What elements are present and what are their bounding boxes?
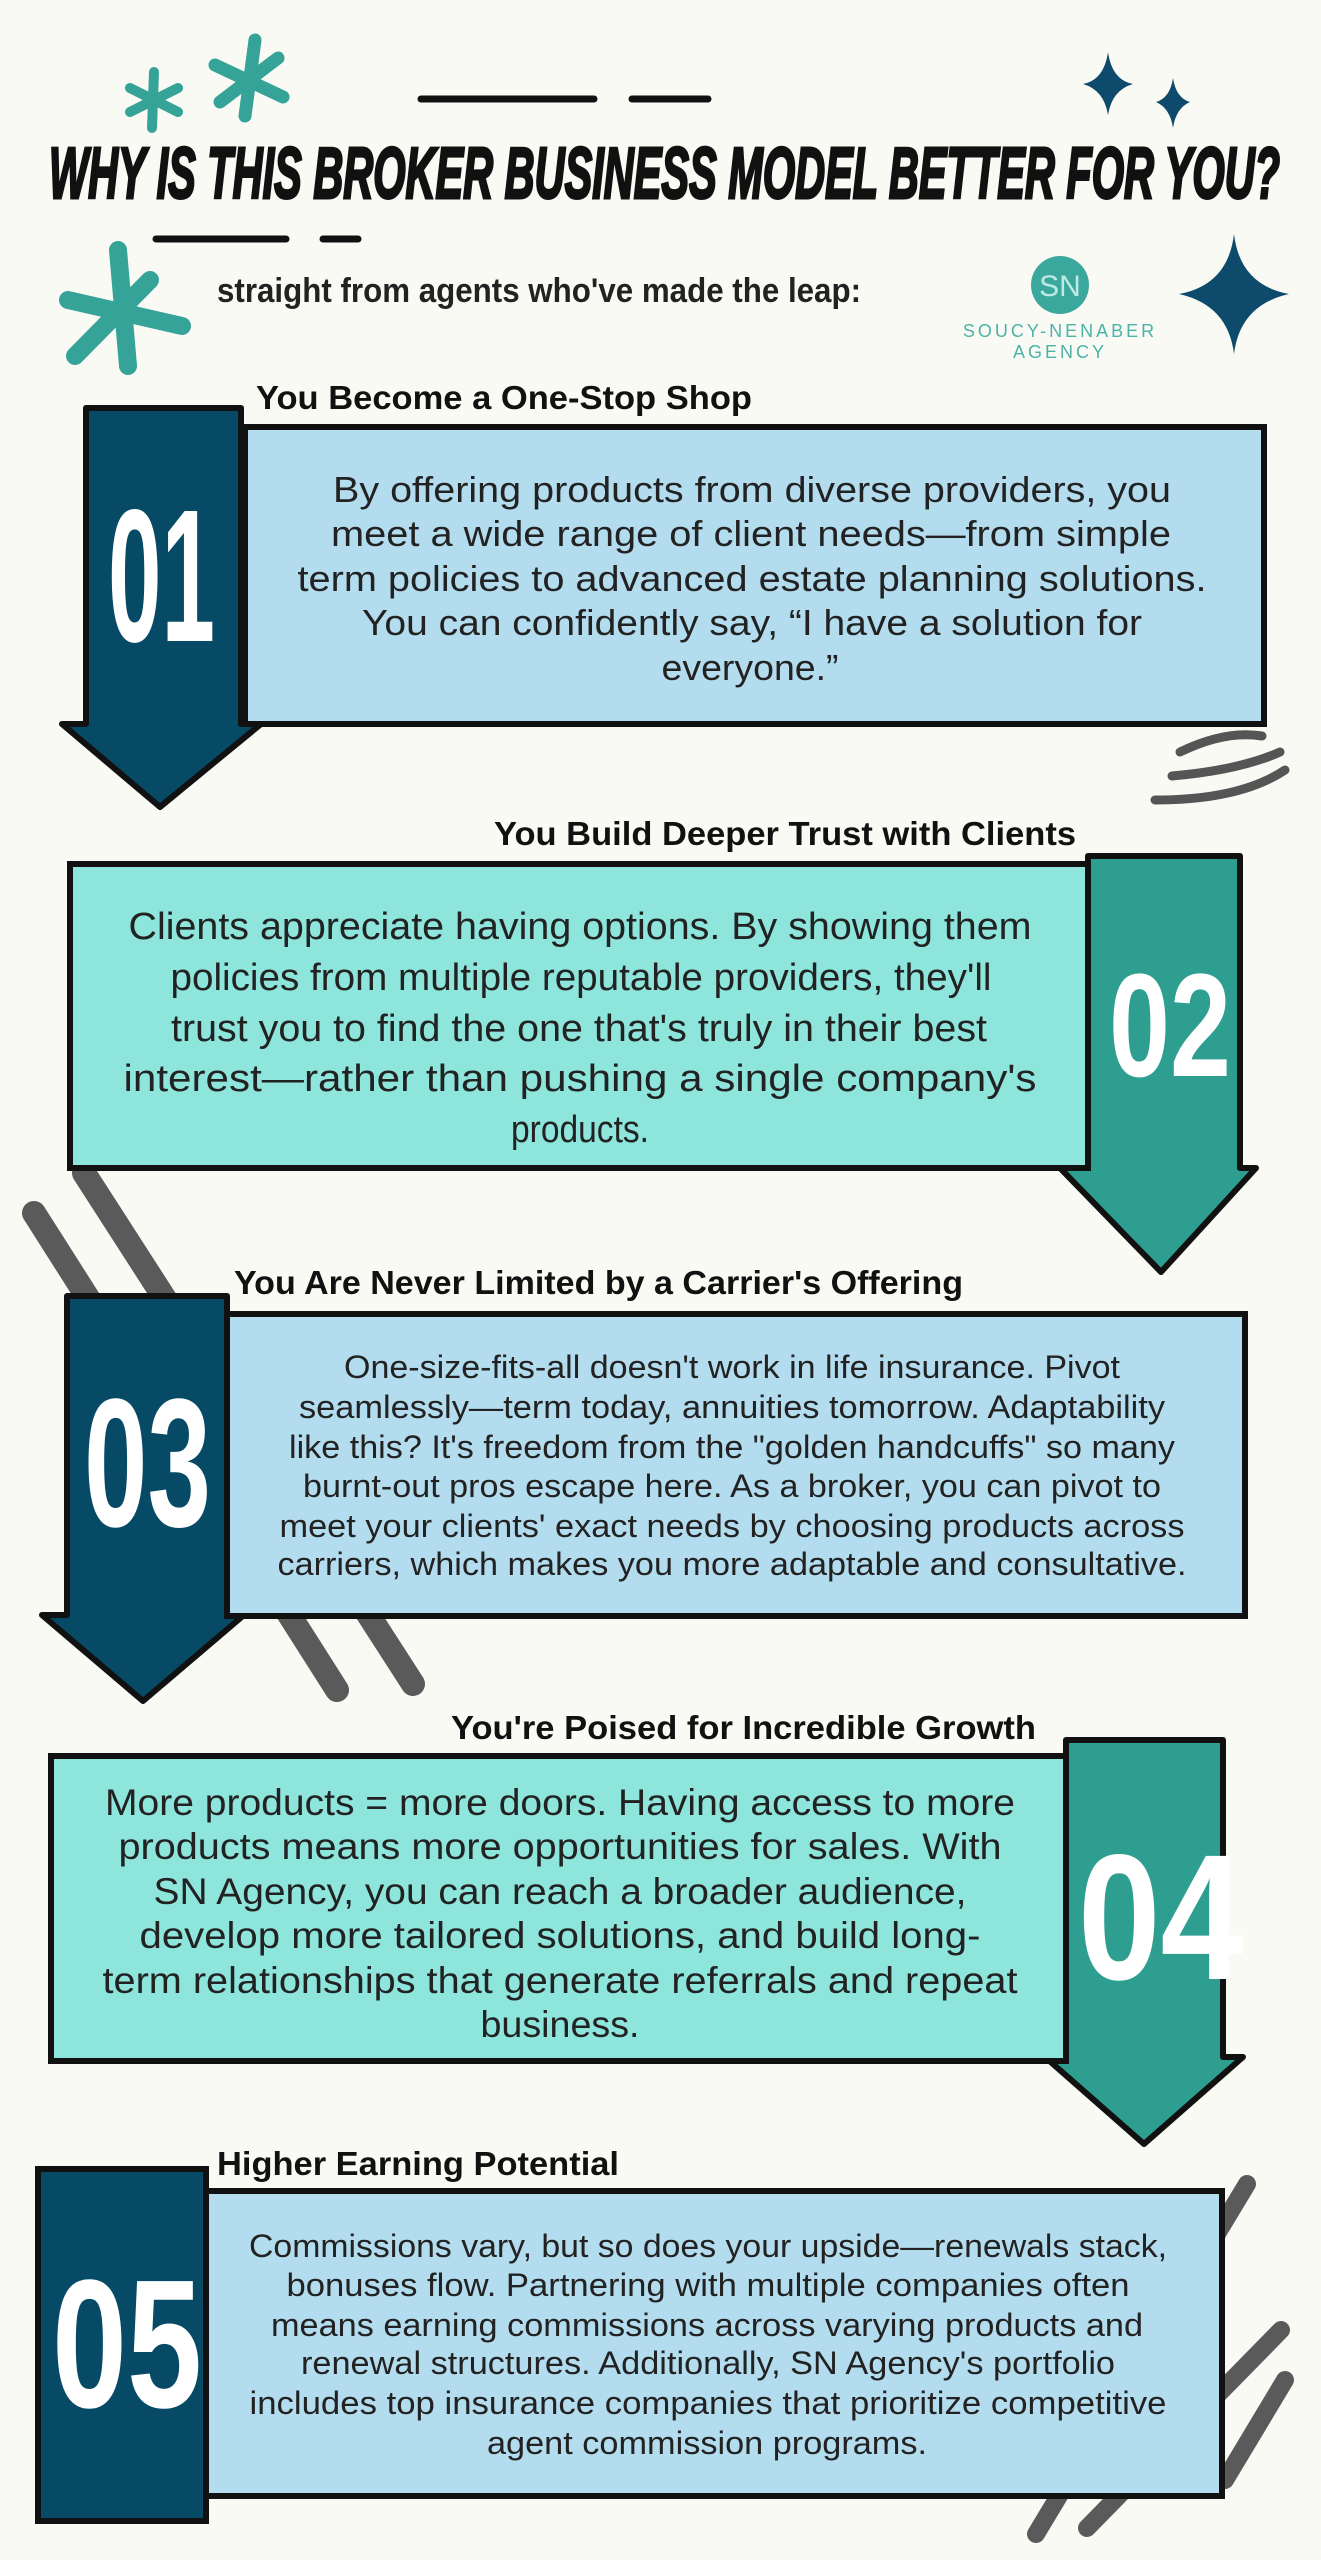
- number 01: 01: [108, 471, 215, 682]
- gray diagonal strokes near section 5: [1036, 2184, 1285, 2534]
- text 05: bonuses flow. Partnering with multiple companies often: [286, 2267, 1130, 2303]
- text 05: Commissions vary, but so does your upside—renewals stack,: [249, 2228, 1167, 2264]
- text 02: Clients appreciate having options. By showing them: [128, 906, 1032, 948]
- arrow 02: [1060, 856, 1256, 1272]
- text 01: [298, 469, 1206, 688]
- section 5: [38, 2145, 1222, 2521]
- text 02: trust you to find the one that's truly in their best: [171, 1008, 987, 1050]
- box 02: [70, 864, 1088, 1168]
- text 04: [102, 1782, 1018, 2045]
- heading 04: You're Poised for Incredible Growth: [451, 1709, 1036, 1746]
- section 4: [51, 1709, 1243, 2144]
- arrow 03: [42, 1296, 244, 1701]
- arrow 04: [1045, 1740, 1243, 2144]
- text 04: develop more tailored solutions, and build long-: [140, 1915, 980, 1956]
- number 02: 02: [1109, 944, 1231, 1108]
- heading 01: You Become a One-Stop Shop: [256, 379, 752, 416]
- heading 02: You Build Deeper Trust with Clients: [494, 815, 1076, 852]
- logo: Soucy-Nenaber Agency: SN: [1039, 270, 1081, 303]
- logo: Soucy-Nenaber Agency: AGENCY: [1013, 342, 1107, 362]
- text 05: renewal structures. Additionally, SN Agency's portfolio: [301, 2345, 1115, 2381]
- text 03: seamlessly—term today, annuities tomorrow. Adaptability: [299, 1389, 1165, 1425]
- text 03: One-size-fits-all doesn't work in life insurance. Pivot: [344, 1349, 1120, 1385]
- heading 03: You Are Never Limited by a Carrier's Offering: [234, 1264, 963, 1301]
- box 04: [51, 1756, 1066, 2061]
- text 01: You can confidently say, “I have a solution for: [362, 602, 1142, 643]
- subtitle: straight from agents who've made the leap:: [217, 272, 861, 310]
- gray diagonal strokes behind section 3: [34, 1173, 413, 1690]
- icon: navy sparkle small 2: [1156, 78, 1190, 128]
- text 03: [278, 1349, 1186, 1582]
- text 04: term relationships that generate referrals and repeat: [102, 1960, 1018, 2001]
- text 02: products.: [511, 1109, 649, 1151]
- text 02: [124, 906, 1036, 1151]
- icon: teal asterisk small: [130, 72, 178, 128]
- text 05: includes top insurance companies that prioritize competitive: [250, 2385, 1166, 2421]
- text 04: SN Agency, you can reach a broader audience,: [154, 1871, 966, 1912]
- text 02: interest—rather than pushing a single company's: [124, 1058, 1036, 1100]
- number 03: 03: [84, 1360, 211, 1565]
- icon: navy sparkle small 1: [1083, 52, 1133, 115]
- text 04: More products = more doors. Having access to more: [105, 1782, 1015, 1823]
- text 01: everyone.”: [662, 647, 838, 688]
- box 05: [206, 2191, 1222, 2496]
- text 05: means earning commissions across varying products and: [271, 2307, 1143, 2343]
- icon: teal asterisk medium: [215, 40, 283, 116]
- arrow 01: [62, 408, 261, 807]
- text 03: carriers, which makes you more adaptable and consultative.: [278, 1546, 1186, 1582]
- text 04: products means more opportunities for sales. With: [118, 1826, 1002, 1867]
- text 05: [249, 2228, 1167, 2461]
- logo: Soucy-Nenaber Agency: [963, 256, 1157, 362]
- text 01: meet a wide range of client needs—from simple: [331, 513, 1171, 554]
- text 05: agent commission programs.: [487, 2425, 927, 2461]
- section 3: [42, 1264, 1245, 1701]
- number 05: 05: [52, 2241, 202, 2446]
- section 1: [62, 379, 1264, 807]
- text 01: term policies to advanced estate planning solutions.: [298, 558, 1206, 599]
- logo: Soucy-Nenaber Agency: SOUCY-NENABER: [963, 321, 1157, 341]
- bar 05: [38, 2169, 206, 2521]
- text 03: burnt-out pros escape here. As a broker, you can pivot to: [303, 1468, 1161, 1504]
- heading 05: Higher Earning Potential: [217, 2145, 619, 2182]
- text 02: policies from multiple reputable providers, they'll: [170, 957, 992, 999]
- text 04: business.: [480, 2004, 640, 2045]
- swoosh lines section 1: [1155, 735, 1285, 800]
- box 03: [227, 1314, 1245, 1616]
- icon: teal asterisk large: [68, 250, 182, 366]
- text 01: By offering products from diverse providers, you: [333, 469, 1171, 510]
- text 03: meet your clients' exact needs by choosing products across: [280, 1508, 1184, 1544]
- dashes top: [156, 99, 708, 239]
- box 01: [245, 427, 1264, 724]
- section 2: [70, 815, 1256, 1272]
- text 03: like this? It's freedom from the "golden handcuffs" so many: [289, 1429, 1175, 1465]
- number 04: 04: [1078, 1817, 1243, 2017]
- icon: navy sparkle large: [1179, 234, 1289, 354]
